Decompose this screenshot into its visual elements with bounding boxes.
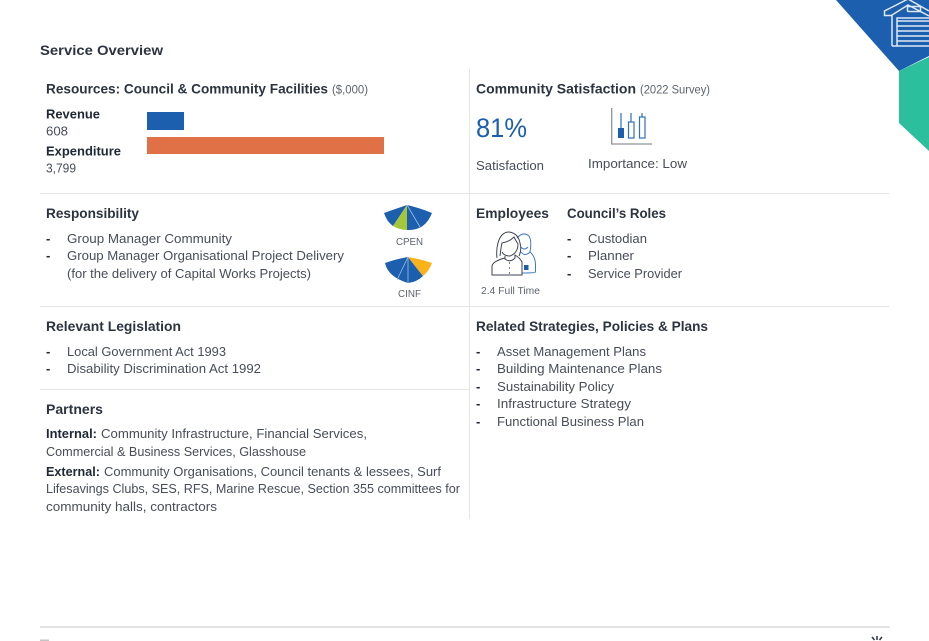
bar: expenditure bbox=[147, 137, 384, 154]
list: roles: - bbox=[567, 231, 571, 246]
text: external partners: community halls, contractors bbox=[46, 499, 218, 514]
title: Service Overview bbox=[40, 42, 163, 58]
bar: revenue bbox=[147, 112, 184, 130]
heading: community satisfaction: Community Satisfaction bbox=[476, 80, 636, 96]
heading: employees: Employees bbox=[476, 205, 549, 221]
corner decoration: green hexagon bbox=[899, 57, 929, 151]
panel: council's roles bbox=[567, 205, 683, 281]
heading: partners: Partners bbox=[46, 401, 103, 417]
list: roles: - bbox=[567, 248, 571, 263]
list: responsibility: - bbox=[46, 248, 50, 263]
text: external partners: Community Organisations, Council tenants & lessees, Surf bbox=[104, 464, 441, 479]
list: responsibility: - bbox=[46, 231, 50, 246]
heading: council's roles: Council’s Roles bbox=[567, 205, 666, 221]
heading: legislation: Relevant Legislation bbox=[46, 318, 181, 334]
heading: resources: Resources: Council & Community Facilities bbox=[46, 80, 328, 96]
list: strategies: Asset Management Plans bbox=[497, 344, 646, 359]
label: full time: 2.4 Full Time bbox=[481, 285, 540, 297]
list: responsibility bbox=[46, 231, 344, 281]
list: roles: Planner bbox=[588, 248, 635, 263]
text: internal partners: Commercial & Business Services, Glasshouse bbox=[46, 444, 306, 459]
label: CPEN: CPEN bbox=[396, 237, 423, 248]
text: internal partners: Community Infrastructure, Financial Services, bbox=[101, 426, 367, 441]
list: legislation: - bbox=[46, 361, 50, 376]
list: legislation: Local Government Act 1993 bbox=[67, 344, 226, 359]
label: expenditure: Expenditure bbox=[46, 144, 121, 158]
text: internal partners: Internal: bbox=[46, 426, 97, 441]
value: expenditure: 3,799 bbox=[46, 160, 76, 176]
list: strategies bbox=[476, 344, 663, 429]
list: strategies: - bbox=[476, 396, 480, 411]
list: responsibility: Group Manager Organisational Project Delivery bbox=[67, 248, 344, 263]
list: roles: Custodian bbox=[588, 231, 647, 246]
heading: responsibility: Responsibility bbox=[46, 205, 139, 221]
list: responsibility: (for the delivery of Capital Works Projects) bbox=[67, 266, 311, 281]
footer logo fragment bbox=[872, 636, 882, 640]
corner decoration: blue hexagon bbox=[836, 0, 929, 71]
list: legislation bbox=[46, 344, 261, 376]
value: revenue: 608 bbox=[46, 124, 68, 138]
panel: strategies bbox=[476, 318, 708, 429]
label: revenue: Revenue bbox=[46, 106, 100, 122]
text: external partners: Lifesavings Clubs, SES, RFS, Marine Rescue, Section 355 committees for bbox=[46, 481, 461, 496]
icon: CINF fan bbox=[385, 257, 432, 283]
list: strategies: Sustainability Policy bbox=[497, 379, 615, 394]
text: internal partners bbox=[46, 426, 367, 459]
icon: employees bbox=[492, 232, 536, 275]
list: strategies: - bbox=[476, 361, 480, 376]
list: roles: Service Provider bbox=[588, 266, 683, 281]
list: strategies: Building Maintenance Plans bbox=[497, 361, 663, 376]
icon: importance chart bbox=[612, 108, 652, 144]
label: importance: Importance: Low bbox=[588, 156, 688, 171]
panel: community satisfaction bbox=[476, 80, 710, 173]
list: strategies: - bbox=[476, 414, 480, 429]
panel: responsibility bbox=[46, 205, 432, 300]
footer rule bbox=[40, 626, 890, 628]
label: CINF: CINF bbox=[398, 289, 421, 300]
list: legislation: - bbox=[46, 344, 50, 359]
text: external partners: External: bbox=[46, 464, 100, 479]
list: responsibility: Group Manager Community bbox=[67, 231, 233, 246]
footer page number fragment bbox=[40, 640, 49, 641]
list: strategies: Functional Business Plan bbox=[497, 414, 644, 429]
list: roles bbox=[567, 231, 683, 281]
label: satisfaction: Satisfaction bbox=[476, 158, 544, 173]
list: strategies: - bbox=[476, 344, 480, 359]
panel: employees bbox=[476, 205, 549, 297]
list: roles: - bbox=[567, 266, 571, 281]
panel: legislation bbox=[46, 318, 261, 376]
heading: strategies: Related Strategies, Policies & Plans bbox=[476, 318, 708, 334]
survey note: (2022 Survey) bbox=[640, 84, 710, 96]
unit note: ($,000) bbox=[332, 84, 368, 96]
list: legislation: Disability Discrimination Act 1992 bbox=[67, 361, 261, 376]
list: strategies: Infrastructure Strategy bbox=[497, 396, 632, 411]
icon: CPEN fan bbox=[384, 205, 432, 230]
stat: 81%: 81% bbox=[476, 113, 527, 143]
icon: garage bbox=[884, 0, 929, 46]
list: strategies: - bbox=[476, 379, 480, 394]
panel: partners bbox=[46, 401, 461, 514]
panel: resources bbox=[46, 80, 384, 176]
text: external partners bbox=[46, 464, 461, 514]
